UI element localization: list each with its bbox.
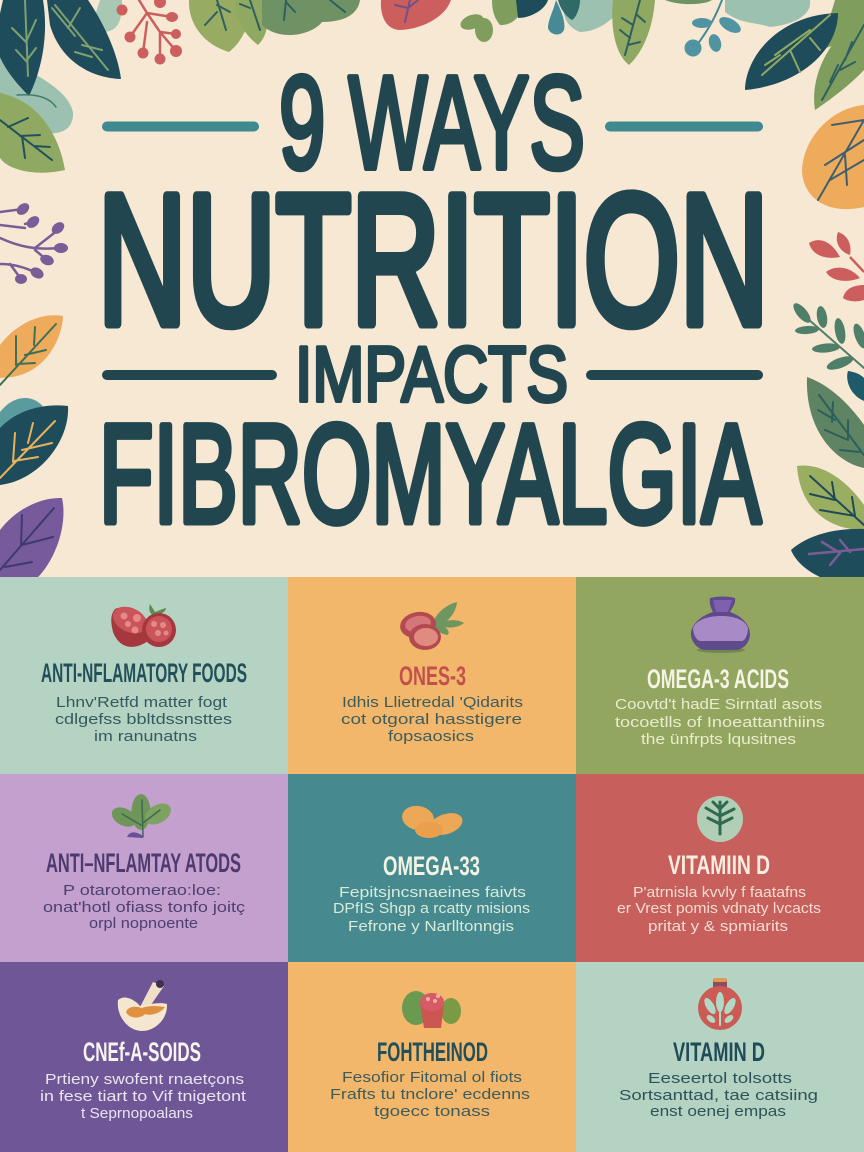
icon: red bottle: [698, 978, 742, 1030]
icon: purple jar: [691, 596, 750, 653]
text block: [330, 1069, 530, 1120]
text block: Lhnv'Retfd matter fogt: [56, 694, 228, 711]
text block: in fese tiart to Vif tnigetont: [40, 1088, 247, 1105]
foliage: red berry sprig: [116, 0, 182, 64]
text block: [619, 1070, 818, 1120]
text block: onat'hotl ofiass tonfo joitç: [43, 899, 246, 916]
text block: [333, 884, 530, 935]
text block: [43, 882, 246, 932]
text block: enst oenej empas: [650, 1103, 786, 1120]
heading: ANTI-NFLAMATORY FOODS: [41, 658, 247, 688]
text block: fopsaosics: [388, 728, 474, 745]
heading: VITAMIIN D: [668, 850, 770, 880]
title line: IMPACTS: IMPACTS: [295, 330, 568, 418]
foliage: purple sprig: [0, 201, 68, 284]
text block: tgoecc tonass: [374, 1103, 490, 1120]
foliage: top centre-left leaves: [189, 0, 360, 52]
text block: t Seprnopoalans: [81, 1105, 193, 1122]
foliage: right lower leaves: [791, 371, 864, 577]
foliage: top-right leaves: [745, 0, 864, 209]
text block: tocoetlls of Inoeattanthiins: [615, 714, 825, 731]
panel: ones-3: [288, 577, 576, 774]
text block: pritat y & spmiarits: [648, 918, 788, 935]
foliage: red leaf top: [381, 0, 451, 30]
text block: Fesofior Fitomal ol fiots: [342, 1069, 522, 1086]
text block: DPfIS Shgp a rcatty misions: [333, 900, 530, 917]
text block: [55, 694, 232, 745]
text block: Fefrone y Narlltonngis: [348, 918, 514, 935]
heading: ONES-3: [399, 661, 466, 691]
text block: cot otgoral hasstigere: [341, 711, 522, 728]
text block: orpl nopnoente: [89, 915, 198, 932]
text block: the ünfrpts lqusitnes: [641, 731, 796, 748]
text block: Eeseertol tolsotts: [648, 1070, 792, 1087]
text block: er Vrest pomis vdnaty lvcacts: [617, 900, 821, 917]
icon: orange nuts: [400, 803, 465, 839]
decorative rule: top right: [605, 122, 763, 132]
foliage: right green sprig: [790, 301, 864, 372]
icon: tomato with leaves: [398, 602, 464, 650]
icon: mortar and pestle: [118, 980, 167, 1031]
icon: herb in green circle: [697, 796, 743, 842]
foliage: left dark leaf: [0, 398, 68, 485]
text block: Fepitsjncsnaeines faivts: [339, 884, 526, 901]
heading: VITAMIN D: [673, 1037, 765, 1067]
panel: cnef-a-soids: [0, 962, 288, 1152]
text block: P'atrnisla kvvly f faatafns: [633, 884, 806, 901]
icon: tomato: [109, 602, 176, 647]
panel: vitamiin d: [576, 774, 864, 962]
icon: bowl with berries: [402, 991, 461, 1028]
heading: OMEGA-3 ACIDS: [647, 664, 789, 694]
text block: [615, 696, 825, 748]
title line: 9 WAYS: 9 WAYS: [279, 49, 585, 196]
heading: ANTI–NFLAMTAY ATODS: [46, 848, 241, 878]
foliage: left purple leaf: [0, 498, 63, 577]
decorative rule: middle left: [102, 370, 277, 380]
panel: anti-inflammatory atods: [0, 774, 288, 962]
text block: P otarotomerao:loe:: [63, 882, 221, 899]
foliage: right red leaves: [809, 232, 864, 301]
heading: CNEf-A-SOIDS: [83, 1037, 201, 1067]
text block: [341, 694, 523, 745]
heading: FOHTHEINOD: [377, 1037, 488, 1067]
text block: Coovtd't hadE Sirntatl asots: [615, 696, 822, 713]
text block: cdlgefss bbltdssnsttes: [55, 711, 232, 728]
panel: anti-inflammatory foods: [0, 577, 288, 774]
foliage: left orange leaf: [0, 315, 63, 385]
decorative rule: middle right: [586, 370, 763, 380]
text block: [617, 884, 821, 935]
panel: omega-33: [288, 774, 576, 962]
text block: Frafts tu tnclore' ecdenns: [330, 1086, 530, 1103]
foliage: top-left cluster: [0, 0, 122, 173]
text block: [40, 1071, 247, 1122]
decorative rule: top left: [102, 122, 259, 132]
foliage: top-right group: [458, 0, 810, 65]
text block: Prtieny swofent rnaetçons: [45, 1071, 244, 1088]
text block: Sortsanttad, tae catsiing: [619, 1087, 818, 1104]
panel: fohtheinod: [288, 962, 576, 1152]
text block: Idhis Llietredal 'Qidarits: [342, 694, 523, 711]
panel: vitamin d: [576, 962, 864, 1152]
icon: green plant: [109, 794, 175, 838]
text block: im ranunatns: [94, 728, 197, 745]
panel: omega-3 acids: [576, 577, 864, 774]
heading: OMEGA-33: [383, 851, 480, 881]
title: [98, 49, 769, 552]
